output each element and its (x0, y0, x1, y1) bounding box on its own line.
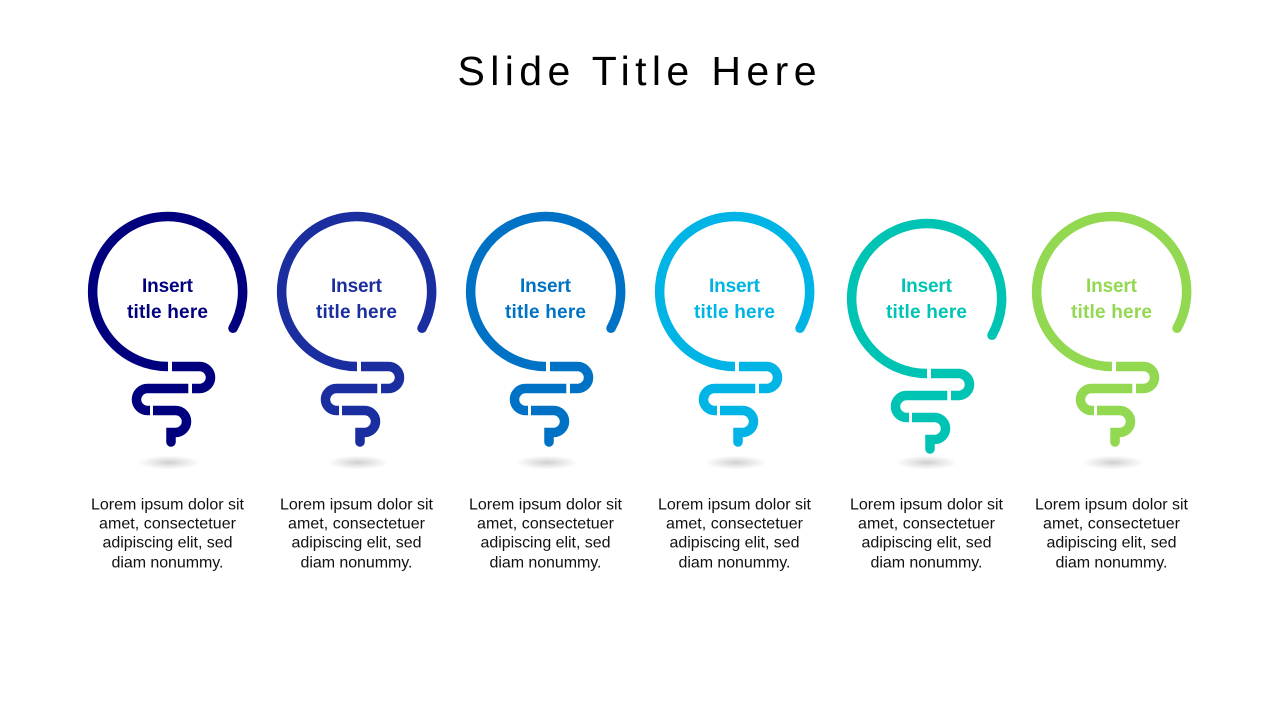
bulb 6 (1035, 217, 1189, 572)
text block 6: amet, consectetuer (1043, 516, 1181, 532)
text block 5: diam nonummy. (870, 554, 982, 572)
text block 6: diam nonummy. (1056, 554, 1168, 572)
text block 6: Lorem ipsum dolor sit (1035, 496, 1189, 514)
text block 3: diam nonummy. (490, 554, 602, 572)
shadow 4 (705, 456, 767, 470)
text block 4: diam nonummy. (678, 554, 790, 572)
text block 1: amet, consectetuer (99, 516, 237, 532)
bulb icon 1 (93, 217, 243, 447)
shadow 2 (327, 456, 389, 470)
heading 5: title here (886, 302, 967, 323)
bulb icon 2 (282, 217, 432, 447)
heading 1: title here (127, 302, 208, 323)
heading 1: Insert (142, 276, 194, 297)
text block 6: adipiscing elit, sed (1046, 534, 1176, 552)
heading 6: Insert (1086, 276, 1138, 297)
text block 4: amet, consectetuer (666, 516, 804, 532)
heading 4: Insert (709, 276, 761, 297)
heading 2: Insert (331, 276, 383, 297)
bulb 4 (658, 217, 812, 572)
heading 2: title here (316, 302, 397, 323)
text block 4: Lorem ipsum dolor sit (658, 496, 812, 514)
text block 2: Lorem ipsum dolor sit (280, 496, 434, 514)
text block 5: Lorem ipsum dolor sit (850, 496, 1004, 514)
heading 3: Insert (520, 276, 572, 297)
heading 4: title here (694, 302, 775, 323)
shadow 6 (1082, 456, 1144, 470)
bulb 3 (469, 217, 623, 572)
text block 2: diam nonummy. (300, 554, 412, 572)
text block 3: Lorem ipsum dolor sit (469, 496, 623, 514)
text block 3: amet, consectetuer (477, 516, 615, 532)
text block 1: Lorem ipsum dolor sit (91, 496, 245, 514)
bulb icon 4 (660, 217, 810, 447)
shadow 3 (516, 456, 578, 470)
text block 1: adipiscing elit, sed (102, 534, 232, 552)
title: Slide Title Here (458, 48, 816, 94)
shadow 5 (896, 456, 958, 470)
heading 5: Insert (901, 276, 953, 297)
bulb icon 5 (852, 224, 1002, 454)
heading 3: title here (505, 302, 586, 323)
bulb 5 (850, 224, 1004, 572)
text block 5: amet, consectetuer (858, 516, 996, 532)
bulb 2 (280, 217, 434, 572)
heading 6: title here (1071, 302, 1152, 323)
bulb 1 (91, 217, 245, 572)
bulb icon 6 (1037, 217, 1187, 447)
bulb icon 3 (471, 217, 621, 447)
text block 1: diam nonummy. (112, 554, 224, 572)
text block 2: adipiscing elit, sed (292, 534, 422, 552)
text block 2: amet, consectetuer (288, 516, 426, 532)
text block 3: adipiscing elit, sed (480, 534, 610, 552)
text block 5: adipiscing elit, sed (862, 534, 992, 552)
shadow 1 (138, 456, 200, 470)
text block 4: adipiscing elit, sed (670, 534, 800, 552)
